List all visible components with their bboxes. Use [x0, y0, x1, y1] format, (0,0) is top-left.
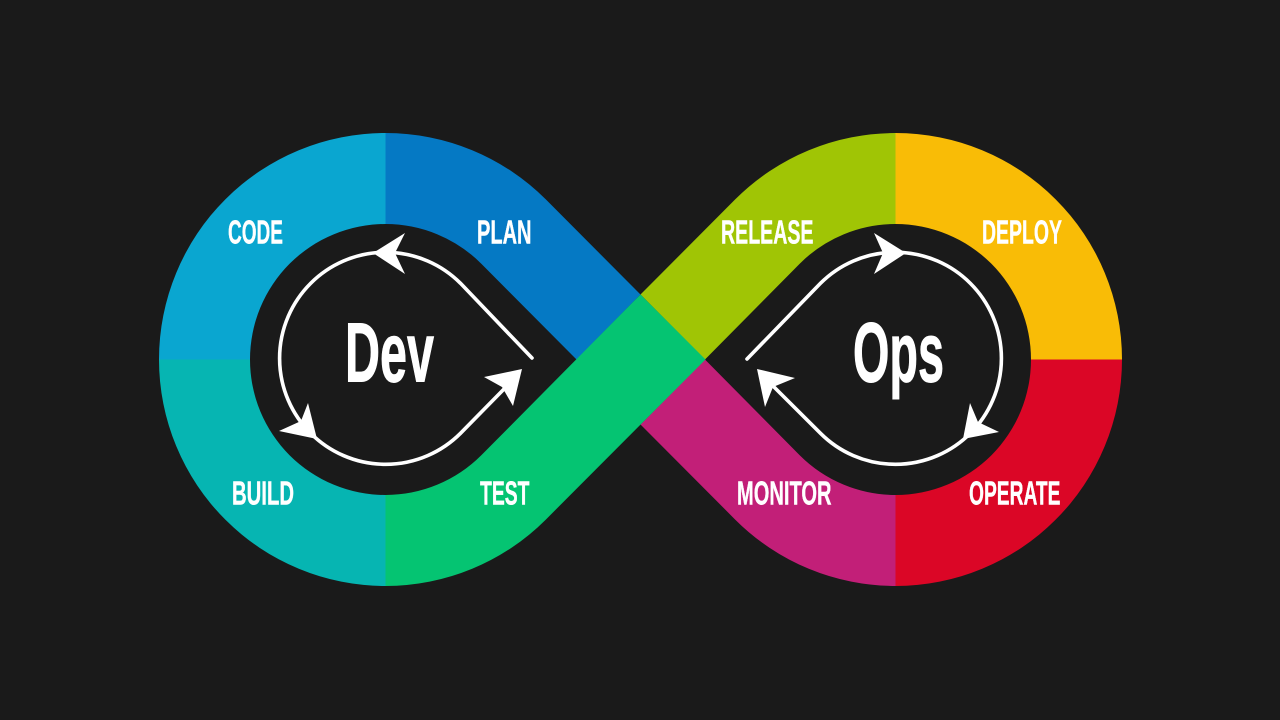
segment: operate [896, 360, 1122, 586]
arrowhead: code [373, 233, 405, 274]
segment: plan [386, 133, 640, 360]
arrowhead: monitor [757, 369, 795, 407]
stage labels [228, 214, 1062, 512]
segment: build [159, 360, 386, 586]
arrowhead: release [874, 233, 906, 274]
label: monitor: MONITOR [737, 474, 832, 512]
heading: Dev: Dev [345, 306, 434, 400]
arrowhead: build [279, 403, 317, 439]
segment: deploy [896, 133, 1122, 360]
loop line: Ops [747, 252, 1001, 464]
label: operate: OPERATE [969, 474, 1060, 512]
label: deploy: DEPLOY [982, 214, 1062, 250]
arrow loop: Dev cycle [279, 233, 532, 464]
segment: test [386, 294, 706, 586]
loop line: Dev [280, 252, 532, 464]
arrowhead: test [484, 369, 522, 406]
heading: Ops: Ops [853, 306, 944, 400]
arrowhead: operate [963, 403, 999, 439]
segment: monitor [640, 360, 896, 586]
label: build: BUILD [232, 474, 294, 512]
label: release: RELEASE [721, 214, 814, 250]
segment: release [640, 133, 896, 360]
arrow loop: Ops cycle [747, 233, 1001, 464]
segment: code [159, 133, 386, 360]
infinity loop segments [159, 133, 1122, 586]
label: code: CODE [228, 214, 283, 250]
label: test: TEST [480, 474, 530, 512]
label: plan: PLAN [477, 214, 532, 250]
